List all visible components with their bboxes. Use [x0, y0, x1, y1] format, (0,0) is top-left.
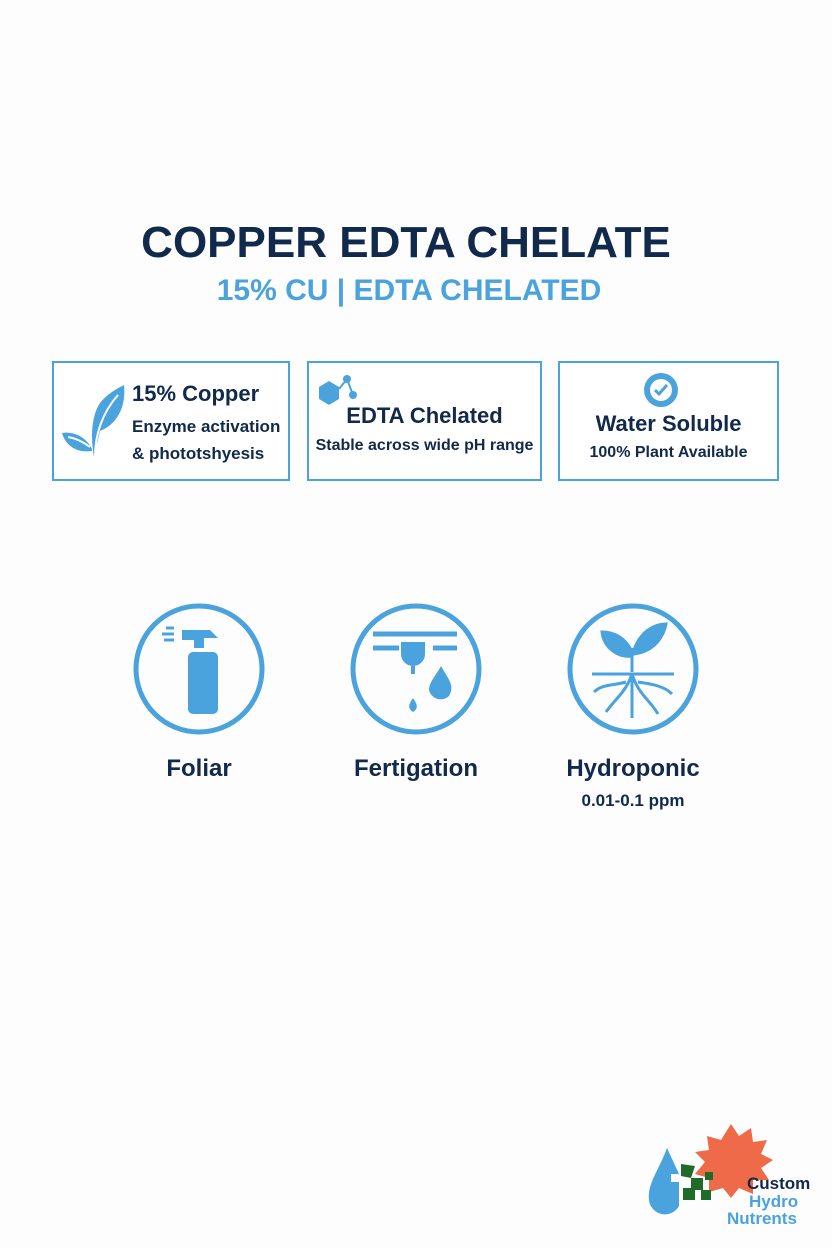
icon: badge: [644, 373, 678, 407]
panel: copper: Enzyme activation: [132, 417, 280, 436]
text: Water Soluble: [596, 411, 741, 436]
title: COPPER EDTA CHELATE: [141, 218, 671, 267]
text: EDTA Chelated: [346, 403, 503, 428]
dosage: 0.01-0.1 ppm: [582, 791, 684, 810]
subtitle: 15% CU | EDTA CHELATED: [217, 274, 601, 307]
label: Foliar: Foliar: [166, 755, 232, 782]
label: Hydroponic: Hydroponic: [566, 755, 700, 782]
icon: fertigation: [350, 604, 482, 734]
logo: Nutrents: [727, 1209, 797, 1228]
label: Fertigation: Fertigation: [354, 755, 478, 782]
icon: molecule: [319, 375, 357, 405]
panel: water soluble: 100% Plant Available: [590, 444, 748, 461]
panel: edta: Stable across wide pH range: [316, 437, 533, 454]
icon: foliar spray: [134, 604, 264, 734]
icon: leaf: [62, 385, 124, 457]
panel: edta: [307, 361, 542, 481]
panel: copper: [52, 361, 290, 481]
panel: water soluble: [558, 361, 779, 481]
logo: Hydro: [749, 1192, 798, 1211]
logo: [648, 1124, 810, 1228]
icon: hydroponic plant: [568, 604, 698, 734]
panel: copper: & phototshyesis: [132, 444, 264, 463]
text: 15% Copper: [132, 381, 259, 406]
logo: Custom: [747, 1174, 810, 1193]
